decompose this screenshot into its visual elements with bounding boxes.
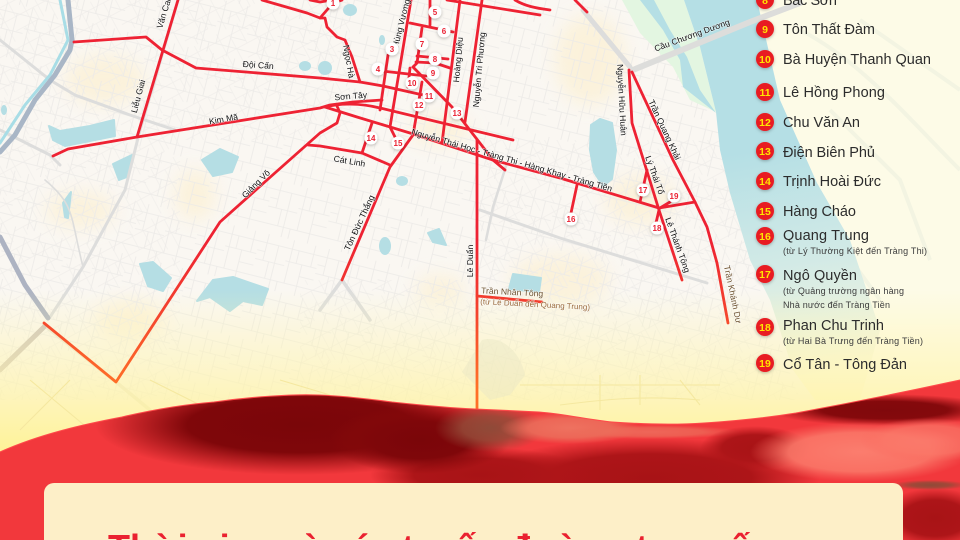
route: 5 bbox=[429, 0, 431, 25]
road name labels: Lê Duẩn bbox=[465, 245, 475, 277]
road name labels: Trần Quang Khải bbox=[646, 98, 683, 161]
route: Tran Nhan Tong bbox=[477, 296, 542, 302]
map: lakes bbox=[2, 5, 616, 311]
route: Nguyen Huu Huan - Le Thanh Tong bbox=[629, 70, 682, 280]
legend: numbered street list bbox=[756, 0, 931, 373]
route: 17 bbox=[640, 170, 647, 202]
legend: numbered street list: Ngô Quyền bbox=[783, 268, 857, 284]
road name labels: Lý Thái Tổ bbox=[643, 154, 666, 196]
route: Co Tan connector bbox=[659, 202, 695, 208]
map: Chuong Duong bridge bbox=[633, 3, 800, 70]
map: ring road bbox=[0, 0, 72, 370]
map: faded lake shape bbox=[462, 339, 525, 400]
map number markers: 14 bbox=[367, 134, 376, 143]
legend: numbered street list: Hàng Cháo bbox=[783, 204, 856, 220]
map number markers bbox=[326, 0, 680, 234]
legend: numbered street list: (từ Hai Bà Trưng đến Tràng Tiền) bbox=[783, 336, 923, 346]
road name labels: Giảng Võ bbox=[240, 168, 272, 200]
road name labels: Trần Khánh Dư bbox=[722, 265, 744, 324]
map number markers: 12 bbox=[415, 101, 424, 110]
legend: numbered street list: 13 bbox=[759, 146, 771, 158]
route: Van Cao - Lieu Giai bbox=[137, 0, 178, 137]
map number markers: 7 bbox=[420, 40, 425, 49]
route: Ton Duc Thang bbox=[342, 82, 422, 280]
route: 4 bbox=[382, 71, 426, 76]
route: Kim Ma - Son Tay bbox=[53, 100, 382, 156]
map number markers: 13 bbox=[453, 109, 462, 118]
map: river bank green bbox=[622, 0, 716, 112]
legend: numbered street list: Cổ Tân - Tông Đản bbox=[783, 357, 907, 373]
road name labels: Lê Thánh Tông bbox=[663, 216, 693, 274]
map: major roads bbox=[0, 0, 800, 410]
route: Cat Linh bbox=[308, 145, 390, 165]
road name labels: Tôn Đức Thắng bbox=[342, 193, 377, 252]
route: 6 bbox=[410, 23, 453, 32]
legend: numbered street list: 18 bbox=[759, 322, 771, 334]
route: 8 bbox=[416, 56, 450, 68]
road name labels: Nguyễn Hữu Huân bbox=[615, 64, 629, 136]
legend: numbered street list: 12 bbox=[759, 117, 771, 129]
legend: numbered street list: 16 bbox=[759, 231, 771, 243]
legend: numbered street list: 11 bbox=[759, 87, 771, 99]
map number markers: 11 bbox=[425, 92, 434, 101]
route: Dien Bien Phu bbox=[413, 67, 505, 170]
map number markers: 8 bbox=[433, 55, 438, 64]
legend: numbered street list: Tôn Thất Đàm bbox=[783, 22, 875, 38]
banned routes network bbox=[44, 0, 728, 409]
road name labels: Đội Cấn bbox=[242, 59, 274, 71]
map: street texture bbox=[0, 0, 800, 400]
road name labels: Cát Linh bbox=[333, 153, 366, 169]
map number markers: 5 bbox=[433, 8, 438, 17]
road name labels: Trần Nhân Tông bbox=[481, 285, 544, 299]
legend: numbered street list: 14 bbox=[759, 176, 771, 188]
map number markers: 19 bbox=[670, 192, 679, 201]
legend: numbered street list: Lê Hồng Phong bbox=[783, 85, 885, 101]
map: faded streets near ribbon bbox=[20, 375, 720, 430]
route: Doi Can bbox=[74, 37, 423, 95]
map number markers: 17 bbox=[639, 186, 648, 195]
info card bbox=[44, 483, 903, 540]
route: Tran Quang Khai - Tran Khanh Du bbox=[632, 72, 728, 323]
route: Hung Vuong bbox=[390, 0, 411, 143]
legend: numbered street list: Bà Huyện Thanh Quan bbox=[783, 52, 931, 68]
legend: numbered street list: Chu Văn An bbox=[783, 115, 860, 131]
route: Nguyen Thai Hoc - Trang Tien bbox=[325, 107, 659, 208]
red silk ribbon bbox=[0, 370, 960, 540]
road name labels: Hoàng Diệu bbox=[451, 36, 465, 83]
road name labels: Sơn Tây bbox=[334, 90, 368, 102]
map: bottom yellow fade bbox=[0, 290, 960, 460]
legend: numbered street list: 15 bbox=[759, 206, 771, 218]
route: Giang Vo bbox=[44, 106, 340, 382]
legend: numbered street list: 10 bbox=[759, 54, 771, 66]
map number markers: 6 bbox=[442, 27, 447, 36]
route: 3 bbox=[380, 55, 388, 110]
legend: numbered street list: 19 bbox=[759, 358, 771, 370]
map number markers: 16 bbox=[567, 215, 576, 224]
ribbon: shading folds bbox=[102, 394, 960, 540]
legend: numbered street list: (từ Lý Thường Kiệt đến Tràng Thi) bbox=[783, 246, 927, 256]
ribbon: top edge highlight bbox=[0, 380, 960, 452]
road name labels: Ngọc Hà bbox=[341, 44, 357, 79]
road name labels: Nguyễn Tri Phương bbox=[471, 32, 487, 108]
road name labels: Cầu Chương Dương bbox=[653, 17, 731, 53]
legend: numbered street list: (từ Quảng trường ngân hàng bbox=[783, 286, 904, 296]
map number markers: 3 bbox=[390, 45, 395, 54]
route: top right bbox=[447, 0, 587, 15]
legend: numbered street list: 9 bbox=[762, 24, 768, 36]
route: Nguyen Tri Phuong bbox=[465, 0, 482, 122]
map: far-bank background bbox=[757, 0, 960, 400]
legend: numbered street list: Trịnh Hoài Đức bbox=[783, 174, 881, 190]
route: 16 bbox=[571, 185, 577, 213]
route: top left bbox=[262, 0, 342, 18]
map number markers: 18 bbox=[653, 224, 662, 233]
legend: numbered street list: Phan Chu Trinh bbox=[783, 318, 884, 334]
road name labels: (từ Lê Duẩn đến Quang Trung) bbox=[480, 297, 591, 312]
route: upper parallel bbox=[325, 104, 513, 140]
map: warm neighbourhood patches bbox=[45, 15, 675, 340]
route: 18 bbox=[656, 210, 659, 223]
map number markers: 9 bbox=[431, 69, 436, 78]
route: Ngoc Ha bbox=[320, 18, 360, 82]
route: Le Duan bbox=[476, 140, 478, 409]
legend: numbered street list: Điện Biên Phủ bbox=[783, 145, 875, 161]
map number markers: 15 bbox=[394, 139, 403, 148]
route: 14 bbox=[362, 123, 372, 153]
map: Red River bbox=[684, 0, 880, 400]
route: 7 bbox=[413, 28, 422, 67]
legend: numbered street list: Nhà nước đến Tràng Tiền bbox=[783, 300, 890, 310]
road name labels bbox=[129, 0, 744, 324]
route: 10 bbox=[408, 68, 410, 87]
road name labels: Kim Mã bbox=[208, 112, 239, 126]
map number markers: 4 bbox=[376, 65, 381, 74]
map: river side channel bbox=[640, 0, 716, 113]
legend: numbered street list: Quang Trung bbox=[783, 228, 869, 244]
route: Hoang Dieu bbox=[442, 0, 460, 143]
road name labels: Nguyễn Thái Học - Tràng Thi - Hàng Khay - Tràng Tiền bbox=[410, 127, 614, 194]
legend: numbered street list: 17 bbox=[759, 269, 771, 281]
map number markers: 10 bbox=[408, 79, 417, 88]
road name labels: Liễu Giai bbox=[129, 78, 147, 114]
